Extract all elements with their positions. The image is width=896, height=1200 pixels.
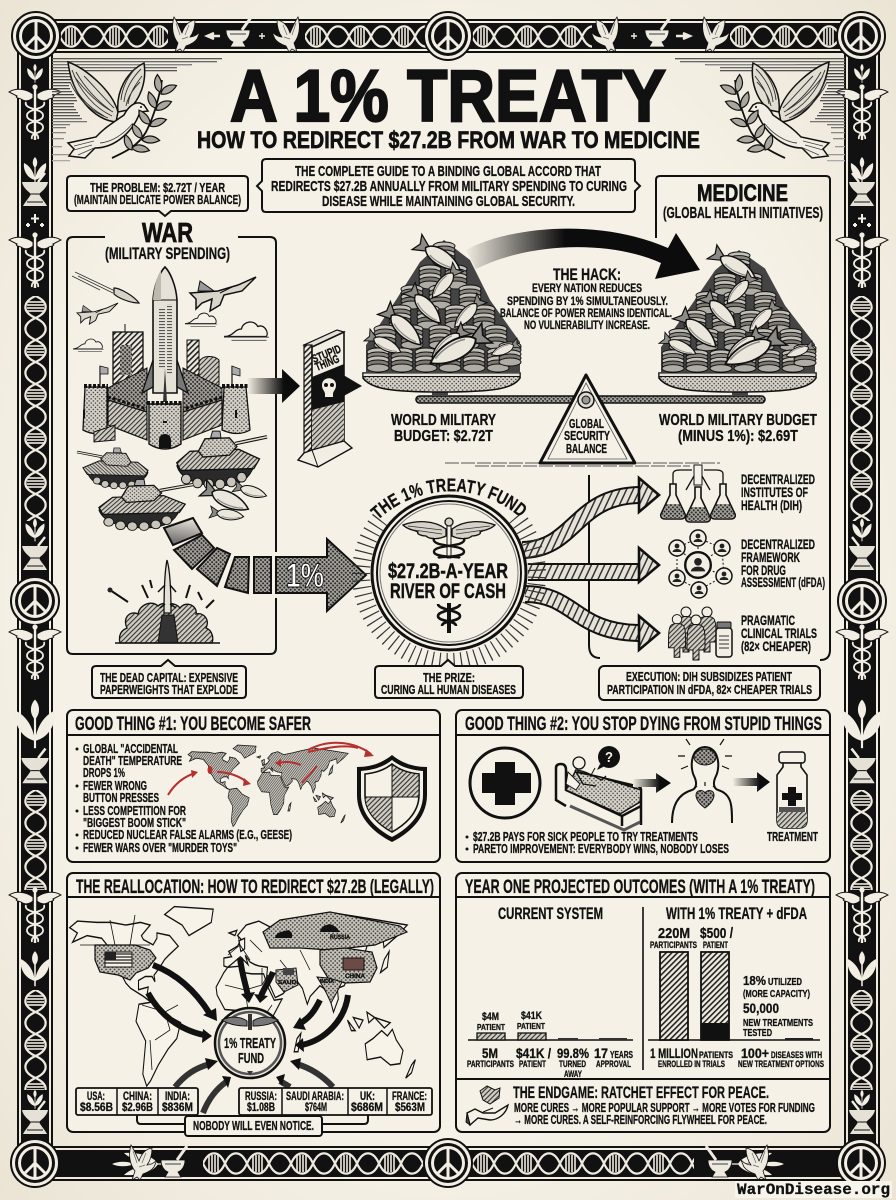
icon: body with brain and heart: [672, 739, 732, 823]
callout: execution: [599, 666, 820, 700]
curved arrow: the hack: [466, 229, 700, 279]
bullet list: [76, 742, 292, 855]
icon: dove with olive branch, right: [675, 58, 845, 161]
icon: treatment bottle: [777, 752, 807, 828]
triangle: global security balance: BALANCE: [566, 442, 607, 456]
icon: patient in bed: [556, 757, 641, 830]
label: world military budget minus 1%: (MINUS 1%): $2.69T: [678, 428, 798, 445]
text: river of cash: $27.2B-A-YEAR: [388, 559, 508, 583]
label: treatment: TREATMENT: [767, 830, 818, 844]
world map: [70, 907, 415, 1086]
right band ornaments: [836, 64, 888, 1134]
chart: current system: YEARS: [610, 1050, 633, 1061]
chart: with treaty: PATIENTS: [699, 1050, 733, 1060]
triangle: global security balance: SECURITY: [564, 429, 610, 443]
panel: medicine: [589, 176, 830, 660]
intro callout: DISEASE WHILE MAINTAINING GLOBAL SECURITY.: [322, 193, 575, 210]
chart: with treaty: NEW TREATMENT OPTIONS: [738, 1059, 824, 1069]
text: the hack: [500, 265, 672, 332]
bullet list: DROPS 1%: [83, 766, 125, 780]
chart: current system: PARTICIPANTS: [467, 1059, 514, 1069]
arrows into the fund: [148, 958, 348, 1113]
text: the 1% treaty fund: THE 1% TREATY FUND: [370, 478, 526, 518]
label: decentralized framework: ASSESSMENT (dFDA): [741, 575, 825, 590]
arrow: [633, 773, 671, 793]
text: the hack: NO VULNERABILITY INCREASE.: [524, 318, 650, 332]
amounts table: right: RUSSIA:: [245, 1091, 277, 1103]
arrow: 1% curved segments: 1%: [286, 557, 324, 595]
callout: the problem: THE PROBLEM: $2.72T / YEAR: [90, 180, 225, 195]
callout: the prize: CURING ALL HUMAN DISEASES: [381, 682, 516, 697]
text: the hack: SPENDING BY 1% SIMULTANEOUSLY.: [507, 294, 668, 308]
label: pragmatic clinical trials: CLINICAL TRIALS: [741, 626, 817, 641]
text: the endgame: → MORE CURES. A SELF-REINFORCING FLYWHEEL FOR PEACE.: [514, 1113, 767, 1127]
icon: network of people: [669, 530, 732, 598]
chart: with treaty: 18%: [743, 973, 766, 988]
chart: with treaty: [648, 926, 824, 1069]
callout: the prize: [375, 660, 523, 698]
amounts table: right: $563M: [395, 1102, 425, 1114]
panel: year one projected outcomes: [456, 873, 830, 1132]
shaded countries with flags: SAUDI: [278, 980, 299, 986]
chart: with treaty: $500 /: [700, 926, 733, 942]
label: pragmatic clinical trials: [741, 613, 817, 654]
chart: current system: PATIENT: [477, 1022, 506, 1032]
intro callout: REDIRECTS $27.2B ANNUALLY FROM MILITARY SPENDING TO CURING: [271, 178, 627, 195]
panel: the reallocation: [67, 873, 440, 1136]
fund seal: RIVER OF CASH: [390, 579, 506, 603]
icon: people and bottle: [668, 607, 732, 660]
map with red arrows: [168, 743, 374, 827]
label: decentralized framework: DECENTRALIZED: [741, 537, 815, 552]
callout: dead capital: PAPERWEIGHTS THAT EXPLODE: [100, 682, 238, 697]
shaded countries with flags: [95, 912, 407, 1003]
amounts table: left: $836M: [162, 1102, 193, 1114]
shaded countries with flags: INDIA: [320, 979, 334, 985]
label: decentralized institutes of health: DECENTRALIZED: [741, 472, 815, 487]
chart: with treaty: 1 MILLION: [650, 1045, 698, 1061]
text: the endgame: [513, 1084, 815, 1127]
callout: nobody will even notice: NOBODY WILL EVEN NOTICE.: [193, 1118, 314, 1133]
illustration: right pile of money and bombs: [659, 245, 816, 373]
text: the hack: EVERY NATION REDUCES: [532, 281, 642, 295]
amounts table: left: CHINA:: [123, 1091, 152, 1103]
bullet list: LESS COMPETITION FOR: [83, 804, 186, 818]
caduceus top: [403, 518, 495, 558]
label: world military budget minus 1%: WORLD MILITARY BUDGET: [659, 412, 817, 429]
amounts table: right: $1.08B: [247, 1102, 275, 1114]
chart: with treaty: ENROLLED IN TRIALS: [658, 1059, 725, 1069]
flow arrows to medicine: [522, 478, 659, 650]
amounts table: left: INDIA:: [165, 1091, 190, 1103]
label: decentralized institutes of health: HEALTH (DIH): [741, 498, 802, 513]
amounts table: right: UK:: [360, 1091, 375, 1103]
illustration: castle with rocket: [83, 267, 250, 449]
subheading: global health initiatives: (GLOBAL HEALTH INITIATIVES): [663, 205, 823, 222]
heading: THE REALLOCATION: HOW TO REDIRECT $27.2B (LEGALLY): [76, 876, 434, 898]
bullets: PARETO IMPROVEMENT: EVERYBODY WINS, NOBODY LOSES: [473, 842, 729, 856]
text: the endgame: THE ENDGAME: RATCHET EFFECT FOR PEACE.: [513, 1084, 769, 1102]
arrow: war to stupid thing: [248, 369, 300, 403]
label: world military budget: BUDGET: $2.72T: [394, 428, 493, 445]
bracket: [137, 1115, 368, 1124]
intro callout: THE COMPLETE GUIDE TO A BINDING GLOBAL ACCORD THAT: [295, 163, 601, 180]
bullet list: DEATH" TEMPERATURE: [83, 754, 182, 768]
label: decentralized institutes of health: [741, 472, 815, 513]
callout: nobody will even notice: [185, 1116, 322, 1136]
footer url: WarOnDisease.org: [737, 1181, 890, 1199]
triangle: global security balance: GLOBAL: [569, 417, 604, 431]
icon: shield: [357, 755, 427, 842]
callout: execution: EXECUTION: DIH SUBSIDIZES PATIENT: [626, 669, 792, 684]
text: the hack: THE HACK:: [553, 265, 621, 284]
amounts table: left: $2.96B: [122, 1102, 153, 1114]
fund seal: FUND: [238, 1050, 264, 1067]
chart: with treaty: PARTICIPANTS: [650, 940, 697, 950]
subheading: military spending: (MILITARY SPENDING): [105, 245, 230, 263]
bullets: $27.2B PAYS FOR SICK PEOPLE TO TRY TREATMENTS: [473, 830, 698, 844]
heading: medicine: MEDICINE: [697, 180, 788, 207]
chart: current system: APPROVAL: [596, 1059, 631, 1069]
amounts table: right: SAUDI ARABIA:: [286, 1091, 344, 1103]
chart: with treaty: 100+: [741, 1045, 769, 1061]
bullet list: BUTTON PRESSES: [83, 791, 159, 805]
chart: current system: $41K /: [516, 1045, 551, 1061]
bullet list: FEWER WRONG: [83, 779, 147, 793]
chart: with treaty: 50,000: [743, 1000, 779, 1016]
sign text: STUPID: [311, 343, 343, 366]
illustration: left pile of money and bombs: [364, 234, 521, 373]
top band ornaments: [60, 16, 840, 52]
amounts table: right: [239, 1088, 432, 1115]
sign text second line: THING: [314, 353, 341, 374]
panel: war: [67, 217, 276, 654]
icon: dove with olive branch, left: [52, 58, 222, 161]
icon: stupid thing sign: [298, 330, 352, 467]
title: A 1% TREATY: [230, 56, 666, 137]
label: decentralized framework: FOR DRUG: [741, 563, 786, 578]
arrow: 1% curved segments: [164, 518, 366, 611]
callout: the problem: [67, 176, 248, 216]
icon: hand holding: [466, 1086, 508, 1125]
fund seal: [215, 1008, 285, 1078]
chart: with treaty: UTILIZED: [768, 977, 802, 988]
skull icon: [322, 378, 336, 397]
chart: with treaty: NEW TREATMENTS: [743, 1017, 813, 1029]
left band ornaments: [9, 64, 61, 1134]
icon: medical cross: [470, 748, 540, 818]
callout: dead capital: [92, 660, 246, 698]
chart: with treaty: DISEASES WITH: [771, 1050, 822, 1060]
illustration: exploding missile: [108, 560, 220, 643]
arrow: [733, 772, 770, 792]
panel: good thing #1: [67, 710, 440, 862]
chart: current system: AWAY: [564, 1069, 582, 1079]
chart: current system: 99.8%: [557, 1045, 589, 1061]
subheading: current system: CURRENT SYSTEM: [498, 905, 603, 923]
amounts table: left: $8.56B: [80, 1102, 113, 1114]
chart: current system: $4M: [482, 1011, 499, 1023]
heading: GOOD THING #1: YOU BECOME SAFER: [75, 713, 311, 735]
amounts table: right: $686M: [351, 1102, 383, 1114]
shaded countries with flags: CHINA: [345, 974, 366, 980]
chart: current system: TURNED: [559, 1059, 586, 1069]
amounts table: left: USA:: [87, 1091, 105, 1103]
callout: dead capital: THE DEAD CAPITAL: EXPENSIVE: [100, 670, 238, 685]
balance scale: [363, 373, 816, 466]
triangle: global security balance: [540, 375, 635, 463]
callout: the problem: (MAINTAIN DELICATE POWER BALANCE): [74, 192, 241, 207]
chart: with treaty: (MORE CAPACITY): [743, 988, 810, 1000]
chart: current system: PATIENT: [517, 1021, 546, 1031]
subheading: with treaty: WITH 1% TREATY + dFDA: [666, 905, 807, 923]
intro callout: [257, 159, 640, 212]
label: decentralized framework: [741, 537, 825, 590]
label: world military budget: [391, 412, 496, 445]
fund seal: [352, 478, 546, 665]
bottom band ornaments: [112, 1145, 784, 1180]
label: pragmatic clinical trials: PRAGMATIC: [741, 613, 795, 628]
label: decentralized institutes of health: INSTITUTES OF: [741, 485, 808, 500]
icon: flasks: [661, 465, 735, 522]
bullet list: GLOBAL "ACCIDENTAL: [83, 742, 178, 756]
callout: the prize: THE PRIZE:: [423, 670, 475, 685]
icon: question bubble: [597, 746, 620, 770]
caduceus bottom: [438, 603, 460, 633]
label: pragmatic clinical trials: (82× CHEAPER): [741, 639, 811, 654]
bullet list: FEWER WARS OVER "MURDER TOYS": [83, 841, 237, 855]
amounts table: right: $764M: [305, 1102, 327, 1114]
amounts table: right: FRANCE:: [392, 1091, 427, 1103]
illustration: jets, missile and clouds: [72, 272, 269, 351]
label: world military budget: WORLD MILITARY: [391, 412, 496, 429]
heading: war: WAR: [142, 217, 193, 248]
bullet list: REDUCED NUCLEAR FALSE ALARMS (E.G., GEESE): [83, 828, 292, 842]
subtitle: HOW TO REDIRECT $27.2B FROM WAR TO MEDICINE: [197, 127, 700, 154]
bullet list: "BIGGEST BOOM STICK": [83, 816, 186, 830]
amounts table: left: [76, 1088, 198, 1115]
text: the hack: BALANCE OF POWER REMAINS IDENTICAL.: [500, 306, 672, 320]
chart: with treaty: 220M: [658, 926, 690, 942]
bullets: [466, 830, 729, 856]
panel: good thing #2: [456, 710, 830, 862]
label: world military budget minus 1%: [659, 412, 817, 445]
chart: with treaty: PATIENT: [703, 940, 728, 950]
chart: current system: [467, 1010, 633, 1079]
arrow: stupid thing onward: [340, 373, 362, 398]
fund seal: 1% TREATY: [224, 1035, 276, 1052]
chart: current system: 5M: [482, 1045, 498, 1061]
shaded countries with flags: RUSSIA: [330, 935, 351, 941]
icon: question bubble: ?: [605, 749, 613, 766]
chart: current system: $41K: [521, 1010, 542, 1022]
label: decentralized framework: FRAMEWORK: [741, 550, 800, 565]
chart: current system: 17: [594, 1045, 608, 1061]
chart: current system: PATIENT: [519, 1059, 546, 1069]
illustration: tanks and bombs: [77, 431, 268, 530]
chart: with treaty: TESTED: [743, 1027, 772, 1039]
